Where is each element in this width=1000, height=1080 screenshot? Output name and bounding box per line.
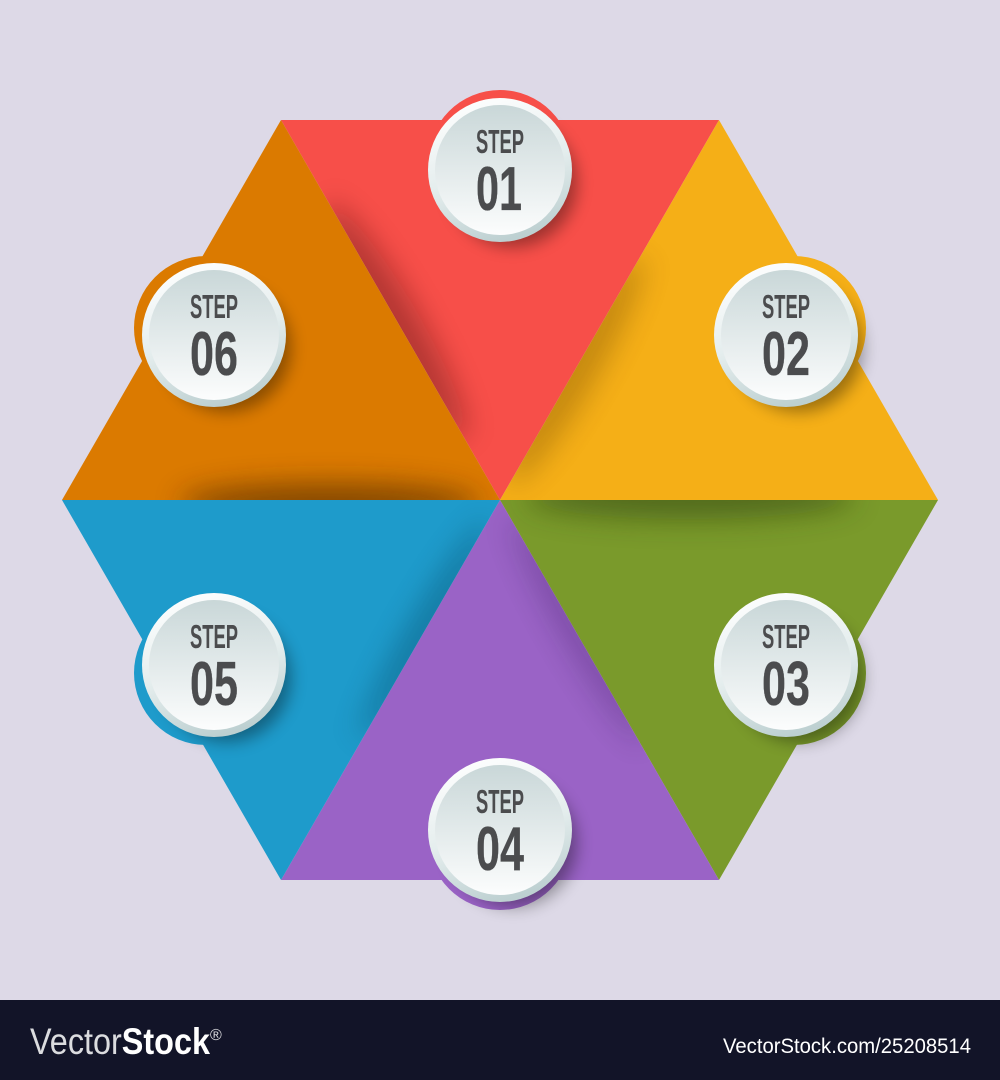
badge: step 06: STEP — [190, 288, 238, 325]
badge: step 05: STEP — [190, 618, 238, 655]
badge: step 01: 01 — [476, 155, 522, 224]
segment: step 02 yellow triangle — [491, 120, 938, 500]
badge: step 03 — [714, 593, 863, 742]
segment: step 03 green triangle — [500, 475, 938, 880]
badge: step 02 — [714, 263, 863, 412]
badge: step 01: STEP — [476, 123, 524, 160]
segment: step 04 purple triangle — [281, 500, 719, 880]
colored tabs behind step badges — [134, 90, 866, 910]
footer registered mark: ® — [210, 1027, 222, 1044]
badge: step 04 — [428, 758, 577, 907]
hexagon chart — [62, 90, 938, 910]
footer logo: VectorStock — [30, 1021, 210, 1062]
badge: step 04: STEP — [476, 783, 524, 820]
segment: step 06 orange triangle — [62, 120, 500, 523]
badge: step 06 — [142, 263, 291, 412]
badge: step 03: 03 — [762, 650, 810, 719]
badge: step 02: 02 — [762, 320, 810, 389]
badge: step 01 — [428, 98, 577, 247]
segment: step 05 blue triangle — [62, 500, 501, 880]
footer url: VectorStock.com/25208514 — [723, 1035, 971, 1058]
badge: step 06: 06 — [190, 320, 238, 389]
segment: step 01 red triangle — [281, 120, 719, 500]
badge: step 04: 04 — [476, 815, 524, 884]
badge: step 03: STEP — [762, 618, 810, 655]
footer bar — [0, 1000, 1000, 1080]
badge: step 02: STEP — [762, 288, 810, 325]
badge: step 05: 05 — [190, 650, 238, 719]
badge: step 05 — [142, 593, 291, 742]
